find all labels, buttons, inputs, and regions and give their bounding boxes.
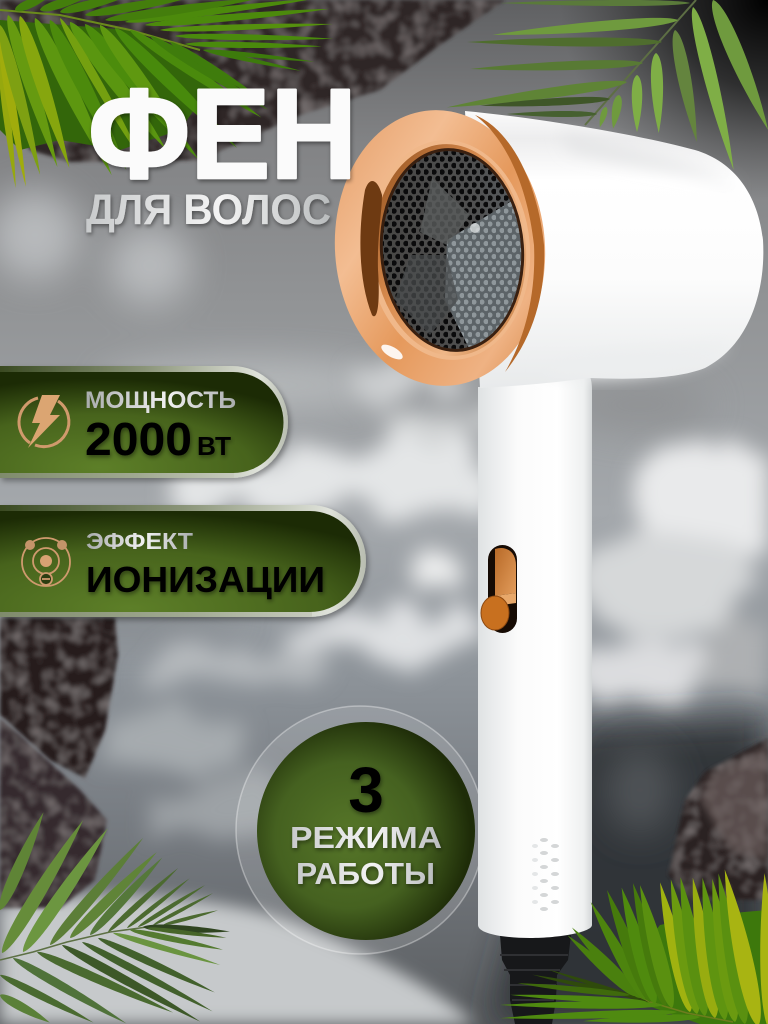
rock: left upper <box>0 618 118 778</box>
power cord <box>500 935 571 1024</box>
ionization pill edge <box>0 505 366 617</box>
palm frond: top left <box>0 0 333 188</box>
rock: right <box>668 738 768 900</box>
power value: 2000 <box>85 413 192 465</box>
power pill lower edge <box>0 472 234 478</box>
icon: lightning bolt <box>19 395 69 448</box>
dryer head body <box>465 111 763 388</box>
mesh grille <box>382 151 522 349</box>
palm frond: bottom right <box>500 868 768 1024</box>
icon: ion atom <box>22 538 70 586</box>
power label: МОЩНОСТЬ <box>85 387 236 414</box>
handle vents <box>532 838 559 911</box>
ionization label: ЭФФЕКТ <box>86 528 193 554</box>
rock: top <box>0 0 505 162</box>
gold outer ring <box>326 103 554 393</box>
badge: 3 modes <box>236 706 484 954</box>
palm frond: top right <box>446 0 768 172</box>
panel: ionization <box>0 505 366 617</box>
rock: left lower <box>0 718 107 908</box>
ionization value: ИОНИЗАЦИИ <box>86 559 325 600</box>
dryer handle <box>478 368 592 938</box>
switch knob <box>481 596 509 630</box>
badge green disc <box>257 722 475 940</box>
power unit: ВТ <box>197 431 231 461</box>
subtitle: ДЛЯ ВОЛОС <box>86 186 331 234</box>
panel: power <box>0 366 288 478</box>
title: ФЕН <box>88 63 357 206</box>
ionization pill lower edge <box>0 611 312 617</box>
hair dryer <box>326 103 763 1024</box>
gold inner ring <box>361 135 537 365</box>
power pill face <box>0 372 284 473</box>
badge label line 2: РАБОТЫ <box>296 856 435 891</box>
palm frond: bottom left <box>0 810 230 1024</box>
badge label line 1: РЕЖИМА <box>290 820 442 855</box>
power pill edge <box>0 366 288 478</box>
badge outer glass ring <box>236 706 484 954</box>
ionization pill face <box>0 511 360 612</box>
switch slot <box>481 545 517 633</box>
number 3: 3 <box>348 754 384 826</box>
